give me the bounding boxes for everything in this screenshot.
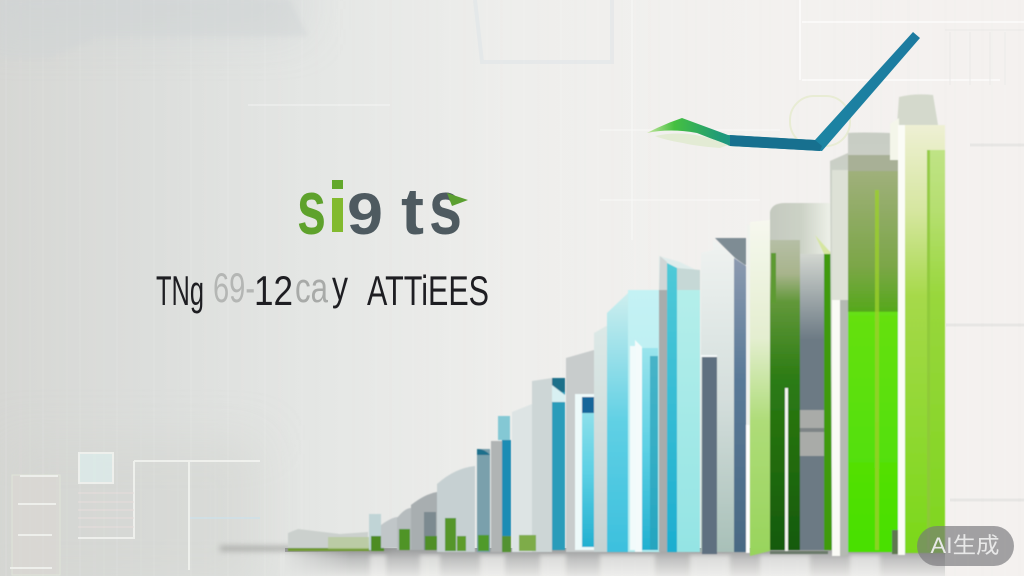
subtitle: 69- [213, 264, 255, 311]
subtitle [156, 262, 489, 314]
bar: big green [830, 132, 898, 556]
glass blue bars [659, 225, 750, 554]
title: 9 [347, 182, 383, 247]
title: s [297, 166, 326, 251]
subtitle: ATTiEES [367, 267, 489, 314]
small bars at chart start [288, 466, 475, 552]
title [297, 166, 468, 251]
badge: AI generated [917, 526, 1014, 566]
subtitle: ca [295, 264, 328, 311]
subtitle: TNg [156, 267, 204, 314]
subtitle: y [332, 262, 348, 309]
title: t [401, 174, 424, 248]
floor reflection [220, 546, 945, 576]
bar chart [288, 94, 945, 556]
title: s [429, 166, 462, 251]
bar: pale green left [750, 220, 770, 556]
mid blue bars [477, 290, 660, 552]
trend line arrow [647, 32, 920, 151]
bar: light green right [897, 94, 938, 125]
decorative panels: lower left [10, 453, 260, 575]
tall green bars [750, 94, 945, 556]
subtitle: 12 [254, 267, 293, 314]
badge: AI generated: AI生成 [930, 533, 1000, 558]
